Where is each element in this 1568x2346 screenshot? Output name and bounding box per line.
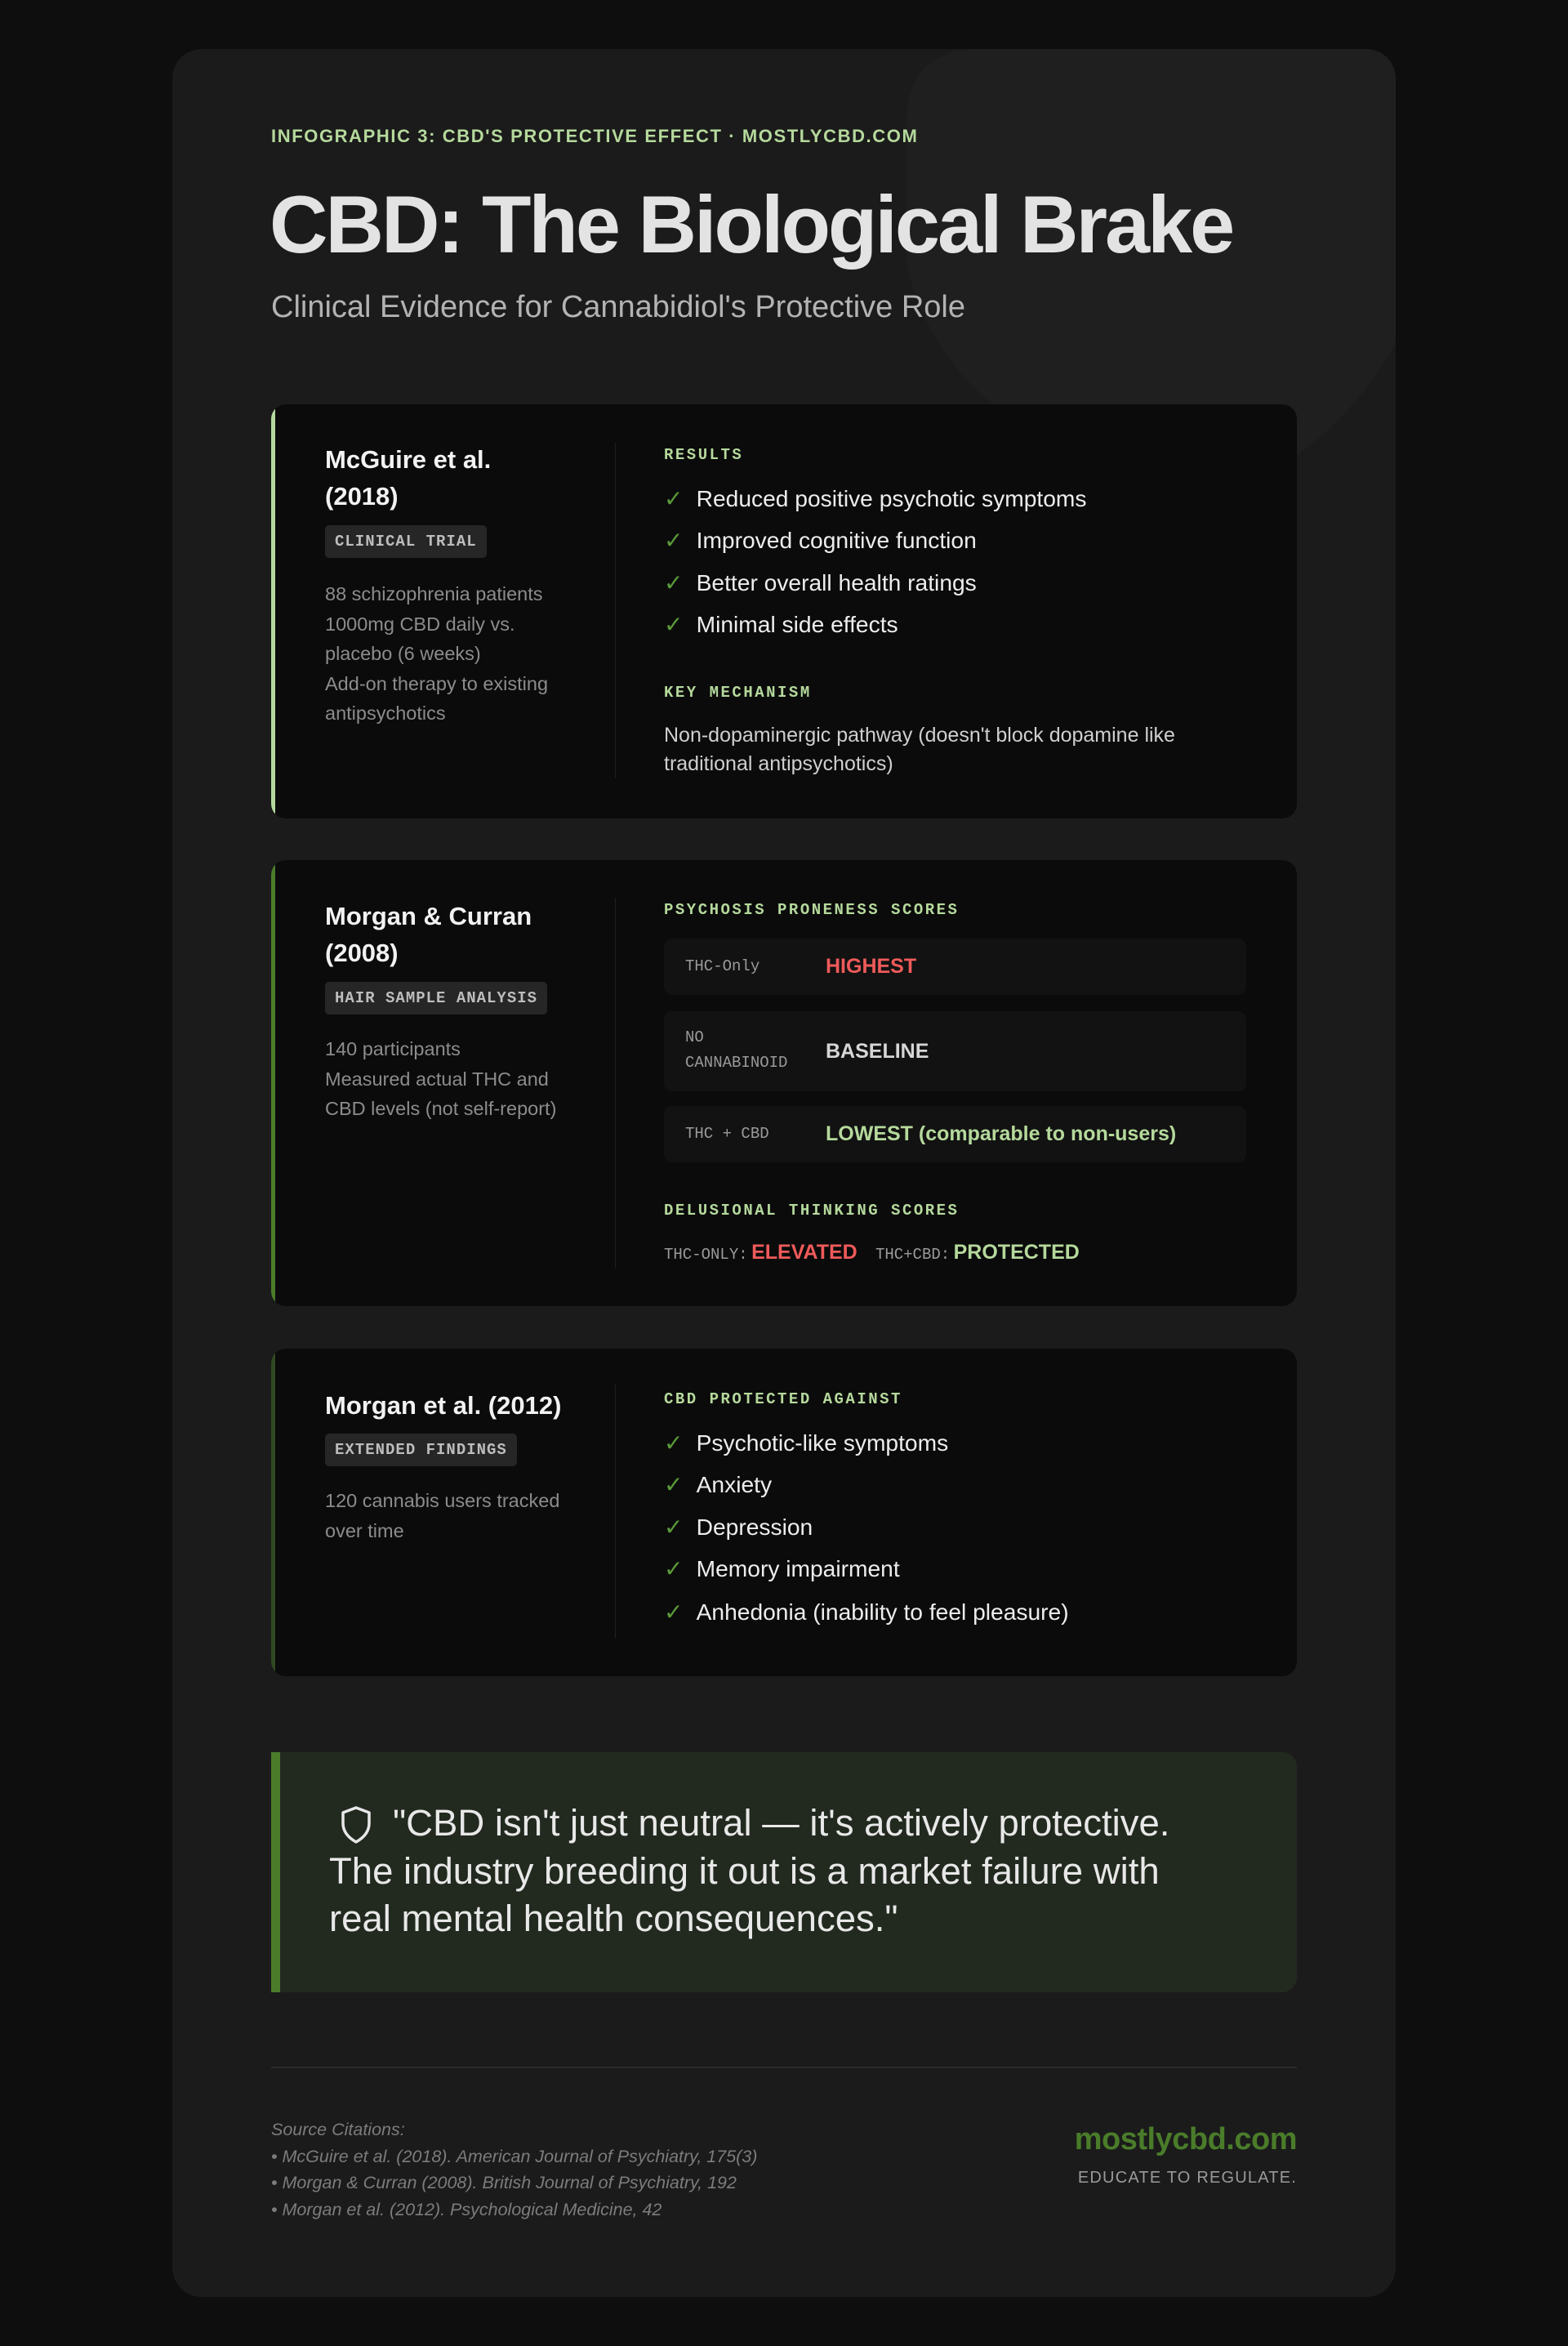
row: THC-only: THC-Only bbox=[685, 957, 760, 975]
header label: INFOGRAPHIC 3: CBD'S PROTECTIVE EFFECT · MOSTLYCBD.COM bbox=[271, 126, 918, 146]
source citations: Source Citations: bbox=[271, 2120, 405, 2139]
results label: RESULTS bbox=[664, 446, 743, 464]
protection list: ✓ Anxiety bbox=[664, 1471, 772, 1497]
row: THC + CBD bbox=[664, 1106, 1246, 1162]
protection list: ✓ Psychotic-like symptoms bbox=[664, 1429, 948, 1456]
protection list: ✓ Anhedonia (inability to feel pleasure) bbox=[664, 1599, 1069, 1625]
study title bbox=[325, 445, 491, 511]
study details: 140 participants bbox=[325, 1038, 461, 1059]
results list bbox=[664, 485, 1086, 637]
card bbox=[172, 49, 1396, 2297]
delusional results: THC-ONLY: ELEVATED THC+CBD: PROTECTED bbox=[664, 1241, 1080, 1264]
psychosis proneness label: PSYCHOSIS PRONENESS SCORES bbox=[664, 901, 959, 919]
study title: Morgan et al. (2012) bbox=[325, 1391, 561, 1420]
study title: (2018) bbox=[325, 482, 399, 511]
quote text bbox=[329, 1802, 1169, 1939]
study details bbox=[325, 1038, 556, 1119]
row: THC-only bbox=[664, 939, 1246, 995]
panel: Morgan et al. 2012 bbox=[271, 1349, 1297, 1676]
row: THC + CBD: LOWEST (comparable to non-users) bbox=[826, 1122, 1176, 1145]
badge: clinical trial: CLINICAL TRIAL bbox=[335, 533, 477, 551]
icon: shield bbox=[341, 1806, 371, 1844]
quote text: The industry breeding it out is a market failure with bbox=[329, 1849, 1160, 1892]
protection list: ✓ Depression bbox=[664, 1514, 813, 1540]
key mechanism text bbox=[664, 724, 1175, 775]
study title: Morgan & Curran bbox=[325, 902, 532, 930]
row: no cannabinoid: CANNABINOID bbox=[685, 1054, 787, 1072]
panel: Morgan & Curran 2008 bbox=[271, 860, 1297, 1306]
study details: antipsychotics bbox=[325, 702, 446, 724]
background shield watermark bbox=[172, 49, 1396, 621]
results list: ✓ Minimal side effects bbox=[664, 611, 898, 637]
study details bbox=[325, 1490, 559, 1541]
study details: placebo (6 weeks) bbox=[325, 643, 481, 664]
key mechanism label: KEY MECHANISM bbox=[664, 684, 812, 702]
source citations: • Morgan et al. (2012). Psychological Medicine, 42 bbox=[271, 2199, 662, 2219]
row: no cannabinoid bbox=[664, 1011, 1246, 1091]
row: THC + CBD: THC + CBD bbox=[685, 1125, 769, 1143]
study title: (2008) bbox=[325, 939, 399, 967]
study details: 120 cannabis users tracked bbox=[325, 1490, 559, 1511]
quote text: real mental health consequences." bbox=[329, 1898, 898, 1939]
study details: over time bbox=[325, 1519, 404, 1541]
study details: Measured actual THC and bbox=[325, 1068, 549, 1090]
protection list bbox=[664, 1429, 1069, 1625]
study title bbox=[325, 902, 532, 967]
tagline: EDUCATE TO REGULATE. bbox=[1078, 2169, 1297, 2187]
key mechanism text: traditional antipsychotics) bbox=[664, 752, 893, 775]
key mechanism text: Non-dopaminergic pathway (doesn't block dopamine like bbox=[664, 724, 1175, 747]
badge: extended findings bbox=[325, 1434, 517, 1466]
callout: quote bbox=[271, 1752, 1297, 1992]
study title: McGuire et al. bbox=[325, 445, 491, 474]
subtitle: Clinical Evidence for Cannabidiol's Protective Role bbox=[271, 290, 965, 324]
results list: ✓ Better overall health ratings bbox=[664, 569, 977, 595]
protection list: ✓ Memory impairment bbox=[664, 1555, 900, 1581]
study details: 1000mg CBD daily vs. bbox=[325, 613, 514, 634]
badge: hair sample analysis: HAIR SAMPLE ANALYSIS bbox=[335, 989, 537, 1007]
badge: hair sample analysis bbox=[325, 982, 547, 1015]
results list: ✓ Reduced positive psychotic symptoms bbox=[664, 485, 1086, 511]
protected against label: CBD PROTECTED AGAINST bbox=[664, 1390, 902, 1408]
badge: clinical trial bbox=[325, 525, 487, 558]
panel: McGuire et al. 2018 bbox=[271, 404, 1297, 818]
quote text: "CBD isn't just neutral — it's actively protective. bbox=[393, 1802, 1169, 1844]
study details bbox=[325, 583, 548, 724]
title: CBD: The Biological Brake bbox=[270, 179, 1232, 270]
source citations: • McGuire et al. (2018). American Journal of Psychiatry, 175(3) bbox=[271, 2147, 757, 2166]
row: THC-only: HIGHEST bbox=[826, 955, 916, 978]
row: no cannabinoid: BASELINE bbox=[826, 1040, 929, 1063]
row: no cannabinoid: NO bbox=[685, 1028, 704, 1046]
badge: extended findings: EXTENDED FINDINGS bbox=[335, 1441, 507, 1459]
study details: 88 schizophrenia patients bbox=[325, 583, 543, 604]
study details: CBD levels (not self-report) bbox=[325, 1098, 556, 1119]
results list: ✓ Improved cognitive function bbox=[664, 527, 977, 553]
brand: mostlycbd.com bbox=[1075, 2122, 1297, 2156]
study details: Add-on therapy to existing bbox=[325, 673, 548, 694]
delusional thinking label: DELUSIONAL THINKING SCORES bbox=[664, 1202, 959, 1220]
score table bbox=[685, 955, 1176, 1145]
source citations: • Morgan & Curran (2008). British Journal of Psychiatry, 192 bbox=[271, 2173, 737, 2192]
source citations bbox=[271, 2120, 757, 2219]
